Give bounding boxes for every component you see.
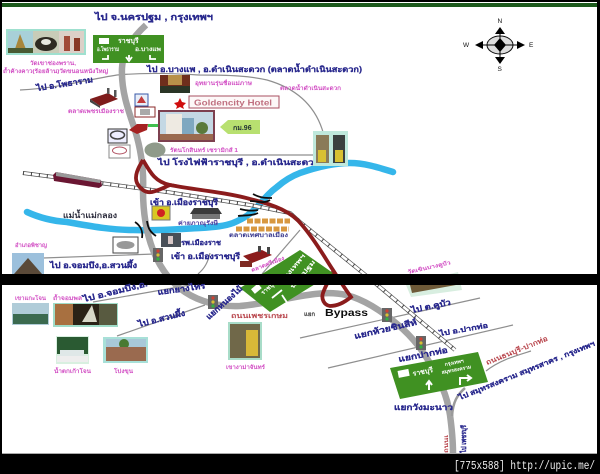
link from road to hotel — [148, 124, 158, 127]
label: hospital: รพ.เมืองราช — [181, 239, 221, 247]
label: Pak Tho junction: แยกปากท่อ — [398, 346, 449, 364]
photo: Khu Bua — [406, 272, 462, 297]
label: to Chom Bueng upper: ไป อ.จอมบึง,อ.สวนผึ้ง — [49, 259, 137, 270]
label: Phetkasem road: ถนนเพชรเกษม — [231, 313, 288, 320]
label: to Khu Bua photo caption: วัดเขินบางคูบัว — [407, 259, 452, 277]
captions: photos row 2 — [54, 366, 133, 375]
caption: Sri Mueang market: ตลาดศรีเมือง — [250, 255, 286, 274]
label: to Suan Phueng: ไป อ.สวนผึ้ง — [136, 307, 186, 329]
label: road vertical: ถนนเ — [443, 435, 450, 453]
road sign: Ratchaburi top — [93, 35, 164, 63]
branch road to Samut Songkhram — [452, 388, 465, 416]
label: Mae Klong river: แม่น้ำแม่กลอง — [63, 209, 117, 220]
label: to Pak Tho: ไป อ.ปากท่อ — [437, 321, 489, 338]
caption: municipal market: ตลาดเทศบาลเมือง — [229, 231, 288, 239]
road sign: Ratchaburi top: อ.บางแพ — [135, 46, 161, 53]
road sign: Ratchaburi top: อ.โพธาราม — [97, 45, 119, 53]
icon: red car — [129, 124, 148, 134]
icon: market building — [90, 88, 118, 108]
captions: photos row 1: ถ้ำจอมพล — [53, 293, 83, 302]
road sign: Nakhon Pathom direction: ราชบุรี — [259, 279, 278, 297]
road sign: Samut Songkhram direction: สมุทรสงคราม — [441, 364, 472, 376]
hotel name label: Goldencity Hotel — [194, 98, 272, 108]
bottom black band — [0, 453, 600, 474]
label: to Phetchaburi vertical: ไป เพชรบุรี — [459, 425, 468, 454]
river: แม่น้ำแม่กลอง — [27, 163, 393, 230]
label: Bypass junction: Bypass — [325, 308, 369, 319]
caption: Khao Wang: เขางาม่าจันทร์ — [226, 364, 265, 371]
top destination label: ไป จ.นครปฐม , กรุงเทพฯ — [94, 11, 213, 23]
photo: waterfall — [56, 336, 89, 364]
logo: yellow red — [152, 206, 170, 220]
label: Wang Manao junction: แยกวังมะนาว — [394, 403, 454, 412]
label: to Samut Songkhram: ไป สมุทรสงคราม สมุทรสาคร , กรุงเทพฯ — [456, 339, 596, 402]
compass: S — [498, 66, 502, 73]
compass: E — [529, 42, 534, 49]
label: Yang Sai junction: แยกยางไทร — [157, 280, 207, 297]
icon: traffic light 2 — [208, 295, 218, 309]
caption: royal park: อุทยานรุ่นชื่อแม่ภาษ — [195, 79, 252, 87]
photo: temples top-left — [6, 29, 86, 55]
caption: temples: ถ้ำค้างคาว(ร้อยล้าน)วัดขนอนหนังใหญ่ — [3, 66, 108, 75]
caption: Phichan: อำเภอพิชาญ — [15, 242, 47, 249]
top green header stripe — [2, 3, 597, 7]
logo: Toyota — [109, 145, 130, 158]
label: Huai Chin Si junction: แยกห้วยชินสีห์ — [353, 317, 418, 341]
star marker — [174, 98, 186, 109]
compass: N — [498, 18, 502, 25]
icon: camp building — [190, 208, 222, 219]
road sign: Samut Songkhram direction — [390, 352, 488, 399]
photo: Chom Phon cave — [53, 303, 118, 327]
hotel photo — [158, 110, 215, 142]
km marker sign — [220, 120, 260, 134]
road sign: Samut Songkhram direction: ราชบุรี — [412, 366, 434, 378]
caption: temples: วัดเขาช่องพราน, — [30, 60, 77, 67]
logo: Mazda — [108, 129, 127, 143]
caption: temples — [3, 60, 108, 75]
caption: floating market: ตลาดน้ำดำเนินสะดวก — [280, 83, 342, 92]
icon: traffic light 1 — [153, 248, 163, 262]
logo: Nissan — [113, 237, 138, 253]
captions: photos row 2: น้ำตกเก้าโจน — [54, 366, 91, 375]
compass: W — [463, 42, 470, 49]
photo: Ratchaburi ceramics — [144, 142, 166, 158]
captions: photos row 1: เขาแกะโจน — [15, 294, 46, 302]
caption: Phanurangsi camp: ค่ายภาณุรังษี — [178, 219, 218, 227]
label: to Bang Phae: ไป อ.บางแพ , อ.ดำเนินสะดวก (ตลาดน้ำดำเนินสะดวก) — [146, 63, 362, 74]
captions: photos row 2: โบ่งขุน — [113, 367, 133, 375]
road sign: Nakhon Pathom direction: นครปฐม — [288, 258, 317, 290]
road sign: Ratchaburi top: ราชบุรี — [118, 37, 139, 45]
label: enter Mueang Ratchaburi lower: เข้า อ.เมืองราชบุรี — [171, 251, 241, 262]
logo: bank — [135, 94, 148, 106]
icon: traffic light 3 — [382, 308, 392, 322]
label: to power plant: ไป โรงไฟฟ้าราชบุรี , อ.ดำเนินสะดวก — [157, 157, 320, 168]
captions: photos row 1 — [15, 293, 83, 302]
km marker sign: กม.96 — [233, 125, 252, 132]
road sign: Samut Songkhram direction: กรุงเทพฯ — [444, 358, 464, 368]
hotel name label — [189, 96, 279, 108]
label: to Khu Bua: ไป ต.คูบัว — [409, 297, 452, 316]
label: Nong Mai junction: แยกหนองไม้ — [204, 283, 245, 321]
photo: royal park — [160, 75, 190, 93]
thin side roads — [20, 73, 531, 371]
label: Thonburi-Pak Tho road: ถนนธนบุรี-ปากท่อ — [485, 335, 549, 367]
icon: traffic light 4 — [416, 336, 426, 350]
railway — [23, 173, 455, 350]
label: to Chom Bueng lower: ไป อ.จอมบึง,อ. — [81, 278, 149, 304]
label: Bypass junction — [304, 308, 369, 319]
icon: municipal market — [236, 221, 290, 229]
road sign: Nakhon Pathom direction — [240, 250, 333, 312]
icons: bridges — [135, 194, 272, 238]
icon: factory market — [240, 246, 272, 267]
caption: Phetch Mueang market: ตลาดเพชรเมืองราช — [68, 108, 124, 115]
photo: floating market — [313, 131, 348, 166]
icon: hospital — [161, 233, 181, 247]
road sign: Nakhon Pathom direction: กรุงเทพฯ — [279, 252, 308, 284]
main highway — [122, 25, 453, 453]
photo: Phichan — [12, 253, 44, 274]
center black band — [0, 274, 600, 285]
logo: shop — [135, 107, 155, 117]
photo: mountain — [12, 303, 49, 325]
label: Bypass junction: แยก — [304, 311, 315, 318]
icon: train — [53, 172, 102, 188]
compass — [463, 18, 534, 73]
photo: Khao Wang — [228, 322, 262, 360]
photo: Khok Sa ruins — [103, 337, 148, 363]
caption: ceramics: รัตนโกสินทร์ เซรามิกส์ 1 — [170, 146, 238, 154]
interchange overpass — [136, 160, 351, 306]
label: enter Mueang Ratchaburi upper: เข้า อ.เมืองราชบุรี — [150, 197, 219, 208]
label: to Photharam: ไป อ.โพธาราม — [35, 74, 94, 93]
